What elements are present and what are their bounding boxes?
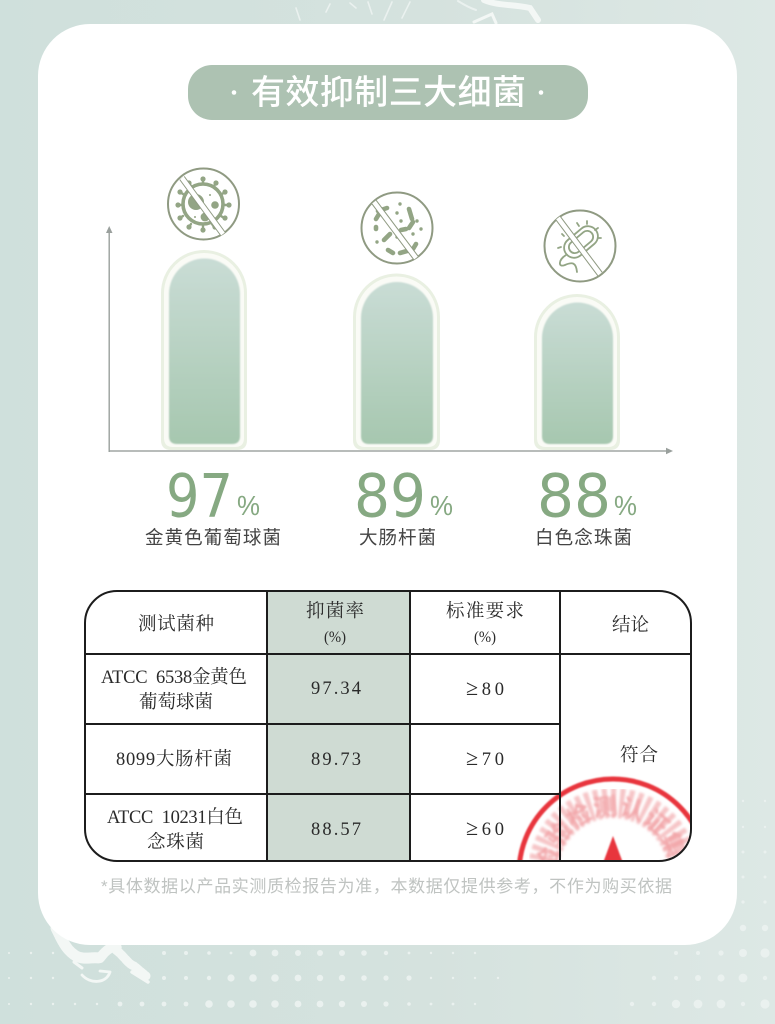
label: 大肠杆菌: 大肠杆菌 [359,527,436,548]
label: 金黄色葡萄球菌: 金黄色葡萄球菌 [145,527,281,548]
footnote: *具体数据以产品实测质检报告为准，本数据仅提供参考，不作为购买依据 [101,877,672,896]
value: 97%: 97 [166,462,233,532]
icon: no Candida [544,210,616,282]
icon: no staphylococcus [168,168,239,240]
data table [84,590,692,862]
white brush texture top [296,0,538,23]
row: 8099: 89.73 [311,750,361,770]
row: ATCC 6538 [101,667,504,713]
row: ATCC 10231: ATCC 10231白色 [107,807,243,828]
value: 89%: 89 [354,462,426,532]
icon: no E. coli [362,192,432,264]
row: ATCC 10231: 88.57 [311,820,361,840]
white brush texture bottom-left [56,928,148,982]
bar chart [106,226,673,454]
header row: 标准要求 [446,601,524,622]
bar: 88% [534,294,620,450]
row: ATCC 10231: ≥60 [466,815,504,840]
row: ATCC 6538: ATCC 6538金黄色 [101,667,247,688]
highlighted rate column [267,591,410,861]
row: ATCC 10231: 念珠菌 [147,832,204,853]
red certification stamp [516,775,690,860]
row: 8099: ≥70 [466,745,504,770]
header row [138,601,649,646]
value: 97%: % [237,490,260,521]
row: ATCC 6538: ≥80 [466,675,504,700]
row: ATCC 6538: 97.34 [311,679,361,699]
header row: 抑菌率 [306,601,364,622]
title pill [188,65,588,120]
row: ATCC 6538: 葡萄球菌 [139,692,213,713]
bar: 97% [161,250,247,450]
bar: 89% [353,274,440,450]
background dot pattern [8,800,770,1009]
header row: (%) [474,629,496,646]
conclusion cell: 符合 [620,745,658,766]
header row: 结论 [612,615,649,636]
label: 白色念珠菌: 白色念珠菌 [535,527,632,548]
value: 88%: % [614,490,637,521]
value: 88%: 88 [537,462,611,532]
row: 8099 [116,745,504,770]
header row: 测试菌种 [138,614,214,635]
value: 89%: % [430,490,453,521]
chart axes [106,226,673,454]
row: 8099: 8099大肠杆菌 [116,749,232,770]
title pill: 有效抑制三大细菌 [251,74,526,112]
table grid [85,591,691,861]
header row: (%) [324,629,346,646]
row: ATCC 10231 [107,807,504,853]
